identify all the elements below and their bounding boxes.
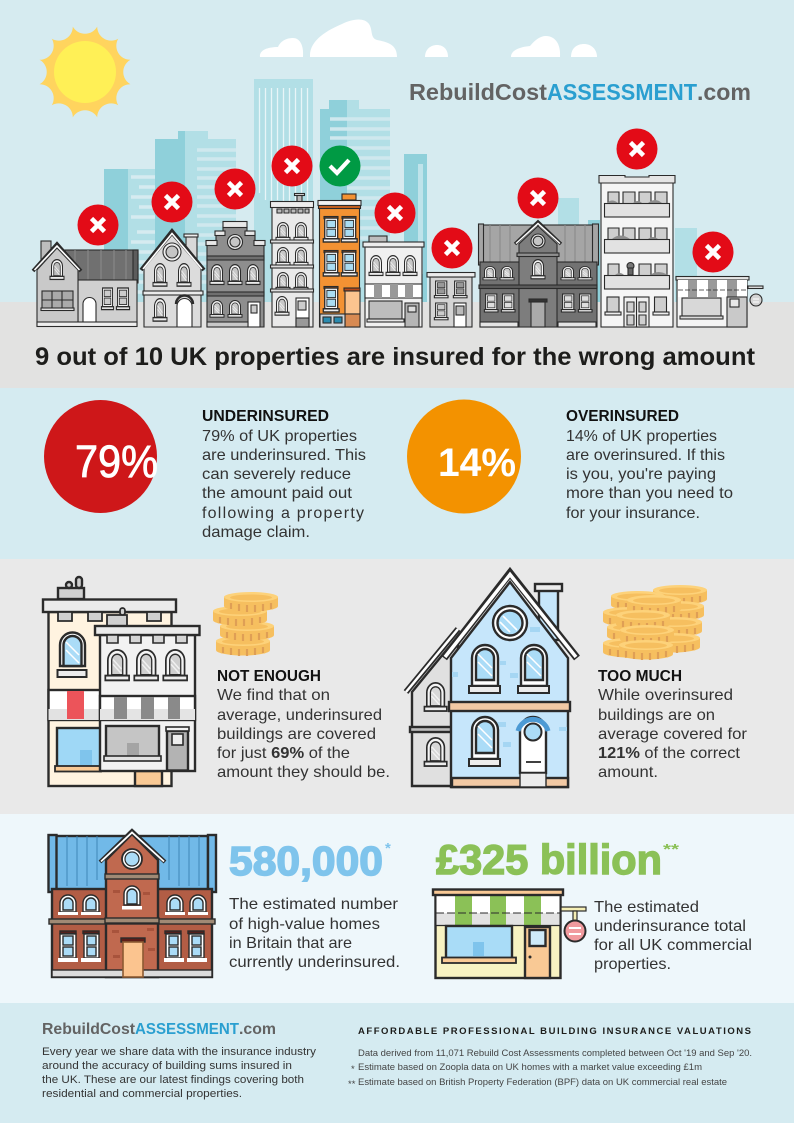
icon: cross badge 10 bbox=[692, 232, 734, 272]
footnotes bbox=[348, 1048, 752, 1090]
underinsured text: are underinsured. This bbox=[202, 447, 366, 464]
panel background: statistics bbox=[0, 814, 794, 1003]
underinsured text: the amount paid out bbox=[202, 485, 353, 502]
illustration: overinsured blue house bbox=[406, 573, 577, 787]
statistic: 580,000: 580,000 bbox=[229, 838, 383, 884]
main blue house bbox=[444, 573, 577, 787]
footnotes: * bbox=[351, 1064, 355, 1075]
house 2: white gabled house bbox=[141, 231, 204, 327]
footer logo: RebuildCost bbox=[42, 1021, 136, 1038]
logo: RebuildCost bbox=[409, 79, 547, 105]
too much text: 121% of the correct bbox=[598, 745, 741, 762]
footer description: around the accuracy of building sums insured in bbox=[42, 1060, 292, 1072]
panel background: under and over insured bbox=[0, 388, 794, 559]
illustration: underinsured buildings bbox=[43, 577, 200, 786]
325 billion description: The estimated bbox=[594, 899, 699, 916]
icon: cross badge 6 bbox=[374, 192, 416, 234]
logo bbox=[409, 79, 751, 105]
front white building bbox=[95, 608, 200, 771]
overinsured text: are overinsured. If this bbox=[566, 447, 725, 464]
ground and headline band bbox=[0, 302, 794, 388]
overinsured text: for your insurance. bbox=[566, 505, 700, 522]
too much text: amount. bbox=[598, 764, 658, 781]
footnotes: Estimate based on British Property Federation (BPF) data on UK commercial real estate bbox=[358, 1077, 727, 1088]
footer logo: ASSESSMENT bbox=[135, 1021, 239, 1038]
overinsured text: is you, you're paying bbox=[566, 466, 716, 483]
statistic: 325 billion pounds: ** bbox=[663, 841, 679, 858]
icon: cross badge 9 bbox=[616, 128, 658, 170]
325 billion description bbox=[594, 899, 752, 973]
icon: cross badge 1 bbox=[78, 204, 118, 246]
panel: underinsured bbox=[44, 400, 366, 541]
sky background bbox=[0, 0, 794, 302]
orange circle with 14 percent bbox=[407, 400, 521, 514]
footer description bbox=[42, 1046, 317, 1100]
illustration: high-value brick home bbox=[48, 831, 216, 977]
325 billion description: properties. bbox=[594, 956, 671, 973]
icon: small coin stack bbox=[213, 592, 278, 656]
not enough heading: NOT ENOUGH bbox=[217, 668, 321, 685]
underinsured text: damage claim. bbox=[202, 524, 310, 541]
not enough text: for just 69% of the bbox=[217, 745, 350, 762]
too much text: buildings are on bbox=[598, 707, 715, 724]
footnotes: ** bbox=[348, 1079, 356, 1090]
too much text: While overinsured bbox=[598, 687, 733, 704]
not enough text: buildings are covered bbox=[217, 726, 376, 743]
house 4: tall white townhouse bbox=[270, 194, 314, 327]
panel background: not enough and too much bbox=[0, 559, 794, 814]
logo: ASSESSMENT bbox=[547, 79, 697, 105]
footer logo: .com bbox=[239, 1021, 276, 1038]
underinsured text: following a property bbox=[202, 505, 364, 522]
icon: green tick badge bbox=[320, 146, 360, 186]
icon: cross badge 7 bbox=[432, 228, 472, 268]
footer strapline: AFFORDABLE PROFESSIONAL BUILDING INSURANCE VALUATIONS bbox=[358, 1026, 751, 1037]
underinsured heading: UNDERINSURED bbox=[202, 408, 329, 425]
too much text: average covered for bbox=[598, 726, 748, 743]
status badges above houses bbox=[78, 128, 734, 272]
house 8: dark manor bbox=[478, 222, 598, 327]
house 9: white apartment block bbox=[599, 176, 675, 327]
footer description: Every year we share data with the insurance industry bbox=[42, 1046, 317, 1058]
footer logo bbox=[42, 1021, 276, 1038]
not enough text: We find that on bbox=[217, 687, 330, 704]
statistic: 580,000: * bbox=[385, 840, 391, 857]
red circle with 79 percent bbox=[44, 400, 158, 513]
580,000 description: The estimated number bbox=[229, 896, 399, 913]
580,000 description: of high-value homes bbox=[229, 916, 380, 933]
panel: overinsured bbox=[407, 400, 733, 522]
325 billion description: for all UK commercial bbox=[594, 937, 752, 954]
red circle with 79 percent: 79% bbox=[75, 436, 158, 487]
house 10: small shop with sign bbox=[676, 276, 763, 327]
too much heading: TOO MUCH bbox=[598, 668, 682, 685]
house 5: orange townhouse bbox=[318, 194, 361, 327]
footnotes: Data derived from 11,071 Rebuild Cost Assessments completed between Oct '19 and Sep '20. bbox=[358, 1048, 752, 1059]
back grey house bbox=[406, 629, 458, 786]
overinsured text: 14% of UK properties bbox=[566, 428, 717, 445]
not enough text bbox=[217, 687, 390, 781]
house 7: small grey house bbox=[427, 272, 475, 327]
icon: cross badge 3 bbox=[214, 168, 256, 210]
underinsured text: 79% of UK properties bbox=[202, 428, 357, 445]
footer description: residential and commercial properties. bbox=[42, 1088, 242, 1100]
580,000 description bbox=[229, 896, 400, 971]
underinsured text bbox=[202, 428, 366, 541]
house 6: white shop townhouse bbox=[363, 236, 424, 327]
footnotes: Estimate based on Zoopla data on UK homes with a market value exceeding £1m bbox=[358, 1062, 702, 1073]
orange circle with 14 percent: 14% bbox=[438, 441, 516, 485]
580,000 description: in Britain that are bbox=[229, 935, 352, 952]
icon: large coin stacks bbox=[603, 585, 707, 660]
icon: sun bbox=[40, 27, 130, 117]
back cream building bbox=[43, 577, 176, 786]
house 1: grey cottage bbox=[33, 241, 138, 326]
headline: 9 out of 10 UK properties are insured for the wrong amount bbox=[35, 343, 756, 371]
overinsured heading: OVERINSURED bbox=[566, 408, 679, 425]
icon: cross badge 4 bbox=[272, 146, 312, 186]
325 billion description: underinsurance total bbox=[594, 918, 746, 935]
illustration: commercial shop bbox=[433, 890, 586, 978]
row of ten houses bbox=[33, 176, 763, 327]
icon: cross badge 8 bbox=[518, 178, 558, 218]
statistic: 325 billion pounds: £325 billion bbox=[436, 836, 662, 883]
580,000 description: currently underinsured. bbox=[229, 954, 400, 971]
house 3: dark grey stepped gable bbox=[206, 222, 265, 327]
not enough text: average, underinsured bbox=[217, 707, 382, 724]
skyline: background towers bbox=[104, 79, 697, 302]
clouds bbox=[260, 19, 597, 57]
too much text bbox=[598, 687, 748, 781]
overinsured text bbox=[566, 428, 733, 522]
icon: cross badge 2 bbox=[152, 182, 192, 222]
panel background: footer bbox=[0, 1003, 794, 1123]
logo: .com bbox=[697, 79, 751, 105]
footer description: the UK. These are our latest findings covering both bbox=[42, 1074, 304, 1086]
not enough text: amount they should be. bbox=[217, 764, 390, 781]
underinsured text: can severely reduce bbox=[202, 466, 351, 483]
overinsured text: more than you need to bbox=[566, 485, 733, 502]
